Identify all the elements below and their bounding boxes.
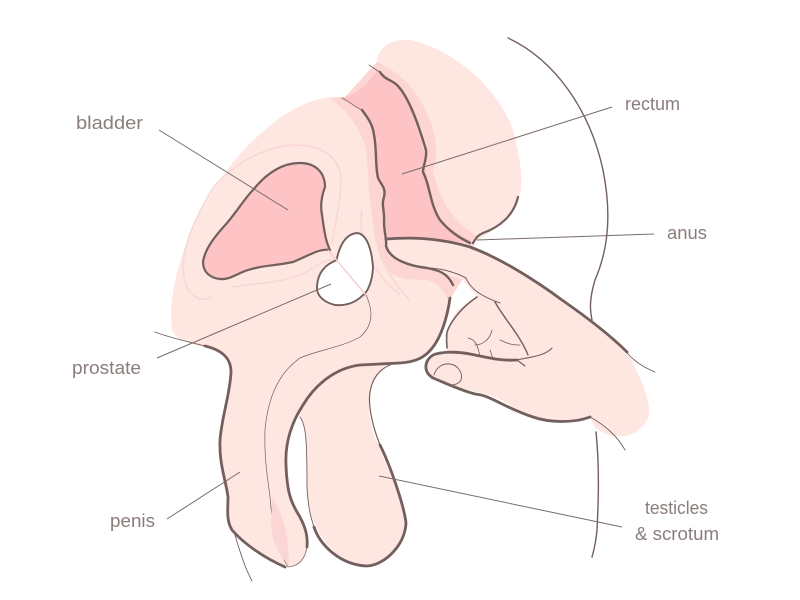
testicles fill [300,360,407,565]
leader line: rectum [402,107,612,174]
back contour line [508,38,608,320]
label: bladder: bladder [76,113,143,133]
finger knuckle line [427,268,500,303]
hand finger overlay [386,238,490,280]
rectum left wall outline [362,110,453,285]
glans pink [271,498,289,565]
thin top of rectum line [369,65,381,73]
lower body outline [286,298,450,547]
label: testicles & scrotum: & scrotum [635,524,719,544]
leader line: penis [167,472,240,519]
leader line: testicles [379,476,622,527]
anatomy illustration [155,38,655,581]
rectum [343,70,473,242]
buttock lower outline [473,197,518,243]
label: prostate: prostate [72,358,141,378]
thin upper rectum left line [342,98,362,110]
thumb outline [426,352,590,422]
bladder [203,163,330,279]
label: penis: penis [110,511,155,531]
label: rectum: rectum [625,94,680,114]
testicle outline [300,417,314,527]
thumbnail [434,364,461,385]
urethra thin line [265,295,371,567]
label: testicles & scrotum: testicles [645,498,708,518]
penis outer outline [205,346,285,567]
prostate [317,233,373,305]
leader line: anus [477,234,654,240]
rectum right wall outline [380,72,470,243]
rectum wall light band [330,62,477,302]
body fill: pelvis, buttock and penis [171,40,521,567]
bladder wall lines [183,145,410,300]
leader line: bladder [159,130,288,210]
leader line: prostate [157,284,331,358]
curled fingers outline [447,297,477,348]
hand fill [386,238,649,436]
leg contour lines [155,332,655,581]
label: anus: anus [667,223,707,243]
finger top outline [386,238,627,352]
